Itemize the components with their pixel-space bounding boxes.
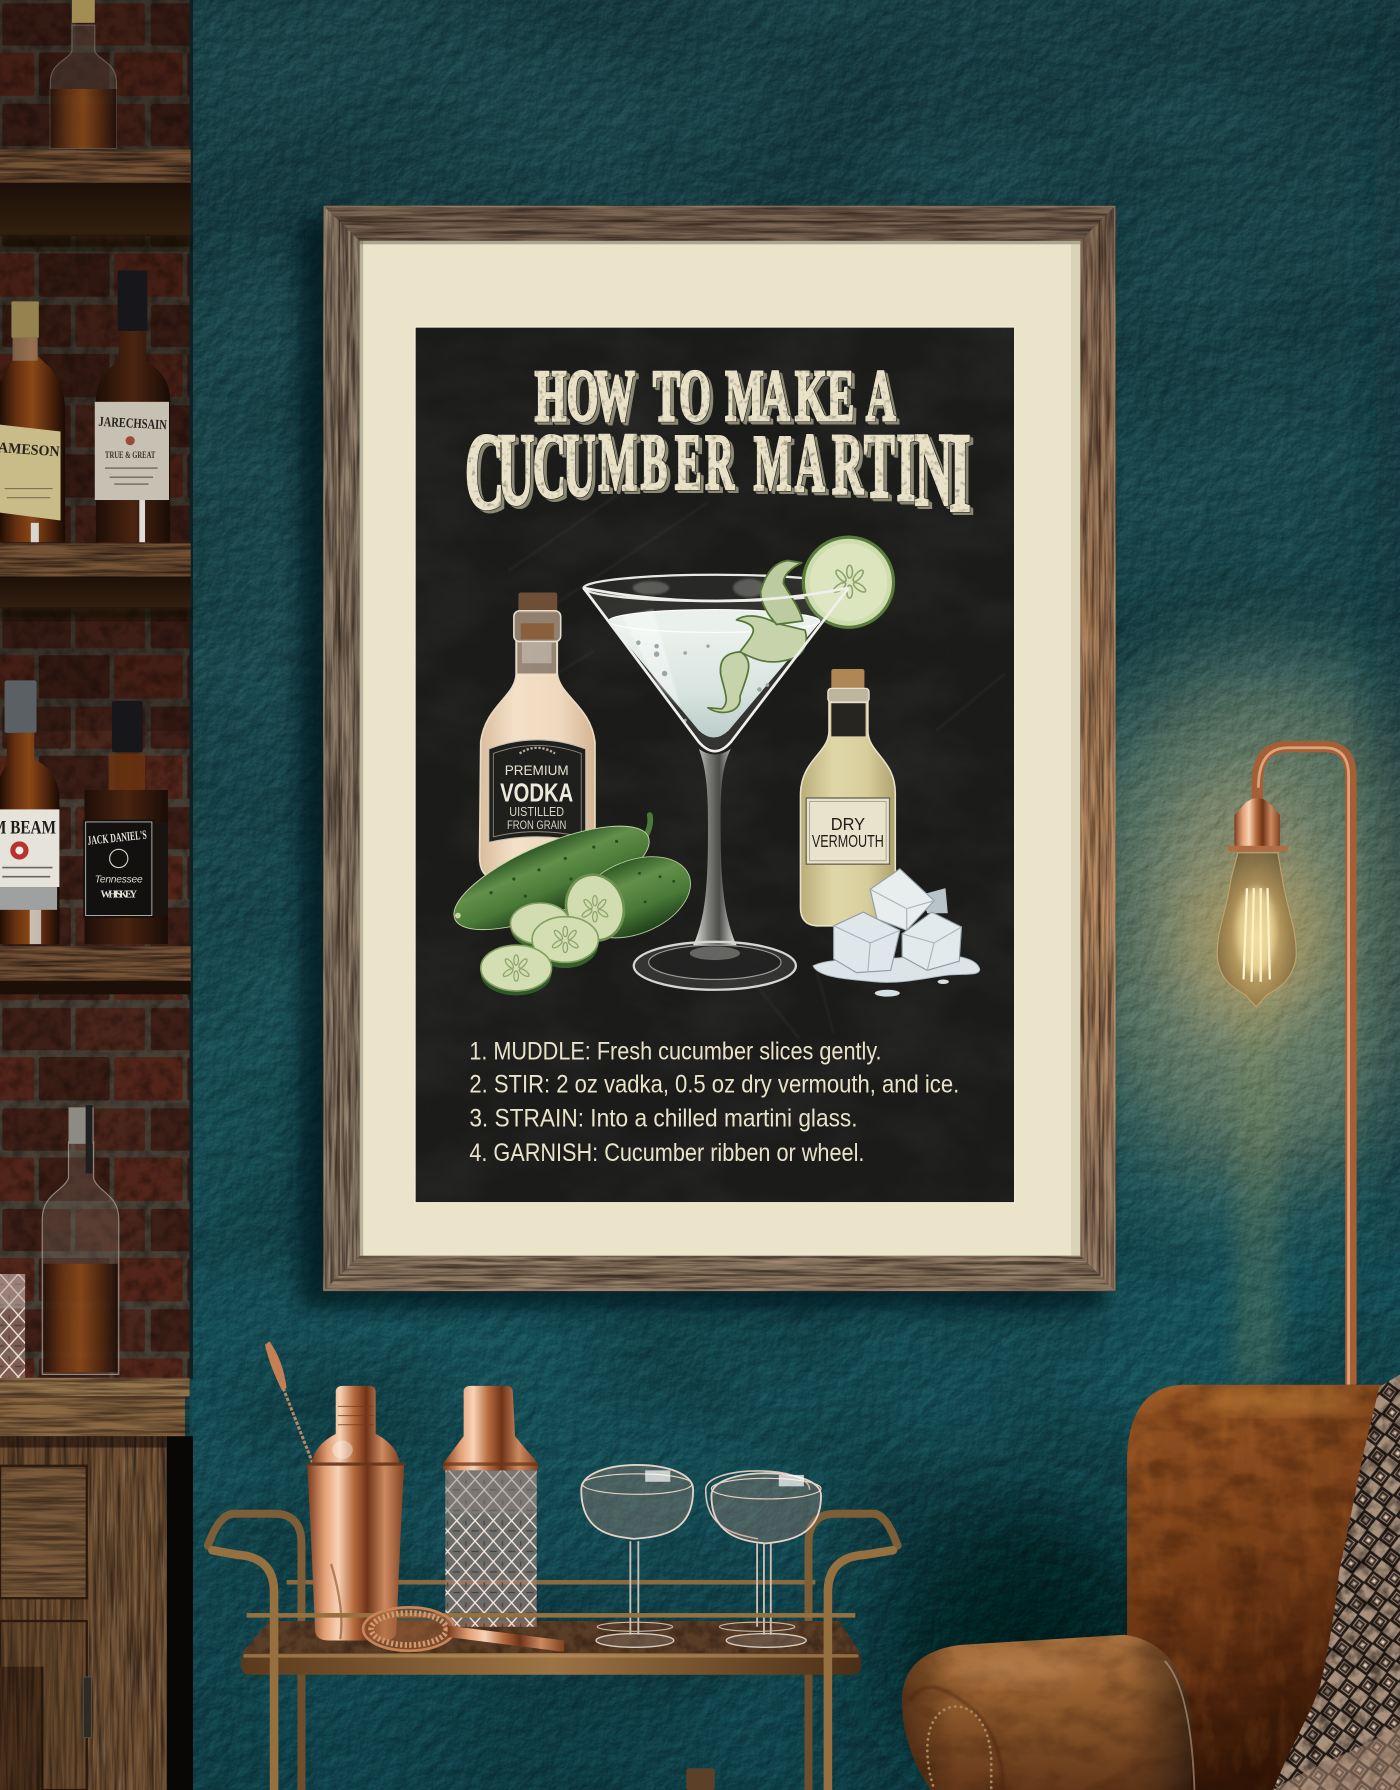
wooden sideboard <box>0 1378 193 1790</box>
bottle: Jim Beam <box>0 680 59 944</box>
brass bar cart: front frame <box>212 1550 893 1790</box>
recipe steps <box>469 1037 959 1167</box>
foot <box>634 942 796 990</box>
floor lamp <box>1188 747 1351 1385</box>
bar spoon <box>265 1341 313 1464</box>
bottle: Jack Daniel's: JACK DANIEL'S <box>87 828 147 848</box>
bottle: clear spirit <box>42 1105 119 1374</box>
shelf 1 <box>0 150 191 250</box>
vodka label: PREMIUM <box>505 763 569 778</box>
vermouth label: VERMOUTH <box>812 832 884 851</box>
cream mat board <box>360 241 1080 1256</box>
bottle: label whiskey: TRUE & GREAT <box>105 450 155 460</box>
title line 1: HOW TO MAKE A <box>535 355 896 436</box>
chair back <box>1127 1385 1400 1790</box>
step 3: 3. STRAIN: Into a chilled martini glass. <box>469 1105 858 1133</box>
socket <box>1228 798 1288 852</box>
coupe glasses <box>581 1465 821 1647</box>
wooden bottle cap <box>686 1768 715 1790</box>
step 2: 2. STIR: 2 oz vadka, 0.5 oz dry vermouth, and ice. <box>469 1070 959 1098</box>
panel: chalkboard poster <box>416 328 1014 1202</box>
coupe 2 front <box>711 1473 821 1647</box>
bottle: top shelf whiskey <box>50 0 116 148</box>
shelf 3 <box>0 946 191 994</box>
illustration: dry vermouth bottle <box>800 669 895 926</box>
tray surface <box>241 1621 861 1654</box>
illustration: cucumber slices <box>481 903 598 995</box>
title line 2: T <box>864 414 895 517</box>
cabinet door <box>0 1621 87 1790</box>
rolled arm <box>902 1635 1194 1790</box>
bottle: Jack Daniel's <box>83 701 168 944</box>
illustration: vodka bottle <box>480 592 595 878</box>
leather armchair <box>902 1385 1400 1790</box>
vodka label: FRON GRAIN <box>507 818 566 832</box>
glass bowl outline and front rim <box>584 588 848 751</box>
brass nail trim <box>927 1706 991 1788</box>
cucumber wheel garnish <box>803 537 894 627</box>
title line 2: U <box>563 415 596 515</box>
brass bar cart: rear frame <box>208 1514 898 1790</box>
crystal mixing shaker <box>443 1386 538 1627</box>
bottle: Jameson <box>0 301 65 542</box>
vodka label: VODKA <box>500 777 573 807</box>
rear rail <box>287 1580 815 1585</box>
bottle: label whiskey <box>95 271 170 542</box>
bowl and liquid <box>584 588 848 749</box>
illustration: martini glass <box>584 537 894 990</box>
crystal tumbler <box>0 1274 25 1385</box>
stem <box>693 749 737 945</box>
title line 2: R <box>832 416 864 512</box>
title line 2: M <box>598 418 637 509</box>
front left post and handle <box>212 1550 274 1790</box>
lower legs <box>301 1672 808 1790</box>
vermouth label <box>806 798 890 864</box>
shelf 2 <box>0 543 191 620</box>
cart tray <box>241 1653 861 1675</box>
illustration: ice cubes <box>813 869 980 997</box>
step 4: 4. GARNISH: Cucumber ribben or wheel. <box>469 1139 864 1167</box>
sideboard top <box>0 1378 190 1448</box>
title line 2: I <box>949 410 971 536</box>
edison bulb <box>1217 853 1296 1007</box>
vodka label <box>489 740 586 842</box>
drawer <box>0 1466 87 1598</box>
title line 2: B <box>641 418 667 506</box>
copper cocktail shaker <box>307 1386 404 1640</box>
title line 2: U <box>497 412 534 526</box>
bottle: label whiskey: JARECHSAIN <box>98 414 167 432</box>
title <box>465 355 971 536</box>
glass back rim <box>584 575 848 601</box>
hinge <box>83 1677 91 1737</box>
cucumber ribbon in drink <box>708 616 806 712</box>
illustration: whole cucumber <box>441 805 662 950</box>
weathered wood frame <box>323 205 1116 1291</box>
title line 2: C <box>465 411 504 532</box>
ribbon over the rim <box>761 561 803 624</box>
title line 2: R <box>705 418 735 506</box>
title line 2: A <box>795 418 825 510</box>
coupe 2 rear <box>706 1471 810 1539</box>
patterned throw blanket <box>1273 1374 1400 1790</box>
title line 2: E <box>675 418 702 506</box>
brick wall with bar shelves <box>0 0 193 1385</box>
picture frame shadow <box>299 219 1104 1309</box>
bottle: Jack Daniel's: Tennessee <box>95 874 143 885</box>
bottle: Jack Daniel's: WHISKEY <box>100 889 138 900</box>
rear left post and handle <box>208 1514 301 1655</box>
illustration: cut cucumber <box>559 841 703 953</box>
title line 2: N <box>915 411 953 527</box>
copper strainer <box>363 1607 564 1652</box>
step 1: 1. MUDDLE: Fresh cucumber slices gently. <box>469 1037 882 1065</box>
rear right post and handle <box>808 1514 898 1655</box>
vodka label: UISTILLED <box>509 805 564 819</box>
title line 2: C <box>533 414 566 517</box>
vermouth label: DRY <box>831 814 865 834</box>
coupe 1 <box>581 1465 693 1647</box>
lamp pole <box>1257 747 1351 1385</box>
front rail <box>247 1613 855 1618</box>
title line 2: I <box>896 414 915 522</box>
title line 2: M <box>754 419 791 507</box>
front right post and handle <box>828 1550 893 1790</box>
